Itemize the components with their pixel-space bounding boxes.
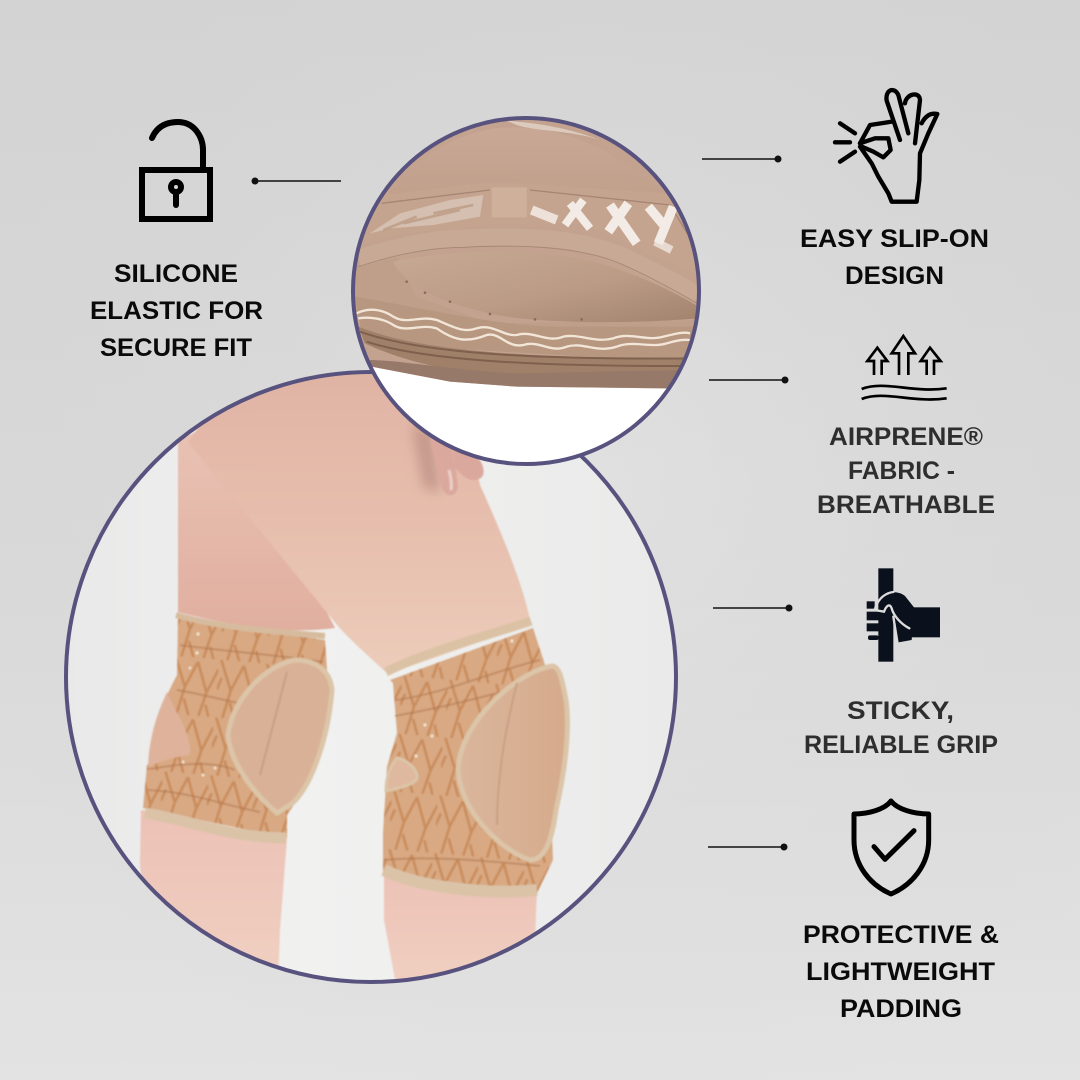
top pad surface — [387, 127, 670, 197]
heading: protective padding: PROTECTIVE & — [803, 921, 999, 949]
heading: easy slip-on: EASY SLIP-ON — [800, 225, 989, 253]
heading: sticky grip — [804, 697, 998, 759]
heading: sticky grip: RELIABLE GRIP — [804, 731, 998, 759]
left hole — [148, 692, 190, 768]
connector: grip — [713, 604, 792, 612]
icon: shield with check — [854, 801, 929, 894]
connector: padding — [708, 844, 788, 850]
heading: silicone elastic: SILICONE — [114, 260, 238, 288]
icon: open padlock — [142, 122, 210, 219]
left pad — [228, 660, 332, 813]
heading: silicone elastic: ELASTIC FOR — [90, 297, 263, 325]
fingers — [430, 436, 484, 495]
connector: slip-on — [702, 156, 782, 162]
right calf — [384, 876, 538, 979]
top rim — [507, 121, 600, 140]
upper strap — [363, 182, 700, 277]
thigh shadow by hand — [412, 425, 440, 492]
heading: easy slip-on — [800, 225, 989, 290]
heading: protective padding — [803, 921, 999, 1023]
left lower fabric — [350, 257, 703, 343]
photo: legs wearing knee pads — [66, 350, 676, 990]
white XXY print — [532, 200, 673, 250]
front thigh — [188, 350, 531, 674]
heading: silicone elastic: SECURE FIT — [100, 334, 252, 362]
right pad — [458, 666, 567, 860]
right wrap — [383, 628, 553, 893]
heading: airprene fabric: AIRPRENE® — [829, 423, 984, 451]
sparkles — [182, 632, 514, 776]
heading: silicone elastic — [90, 260, 263, 362]
icon: OK hand — [835, 90, 937, 202]
heading: protective padding: LIGHTWEIGHT — [806, 958, 995, 986]
fabric base — [350, 110, 710, 389]
heading: easy slip-on: DESIGN — [845, 262, 944, 290]
silver print left — [370, 195, 483, 233]
left calf — [140, 810, 287, 985]
elastic bands — [176, 615, 325, 636]
thick rim — [358, 256, 396, 266]
heading: airprene fabric: FABRIC - — [848, 457, 955, 485]
pocket stitching — [405, 280, 583, 321]
left back thigh — [178, 430, 335, 630]
heading: sticky grip: STICKY, — [847, 697, 954, 725]
silicone waves — [357, 310, 690, 340]
connector: airprene — [709, 376, 788, 384]
heading: airprene fabric — [817, 423, 995, 519]
dark stitched stripes — [359, 327, 682, 374]
icon: breathable arrows — [862, 336, 947, 399]
icon: hand gripping pole — [867, 568, 940, 662]
left wrap — [143, 618, 332, 838]
lower rim — [356, 297, 693, 358]
wrap folds — [148, 645, 323, 812]
inner pocket — [394, 262, 696, 322]
photo: close-up of knee pad interior — [350, 110, 710, 464]
heading: airprene fabric: BREATHABLE — [817, 491, 995, 519]
heading: protective padding: PADDING — [840, 995, 962, 1023]
connector: silicone elastic — [252, 178, 341, 184]
tab — [492, 187, 527, 217]
right hole — [386, 758, 417, 791]
